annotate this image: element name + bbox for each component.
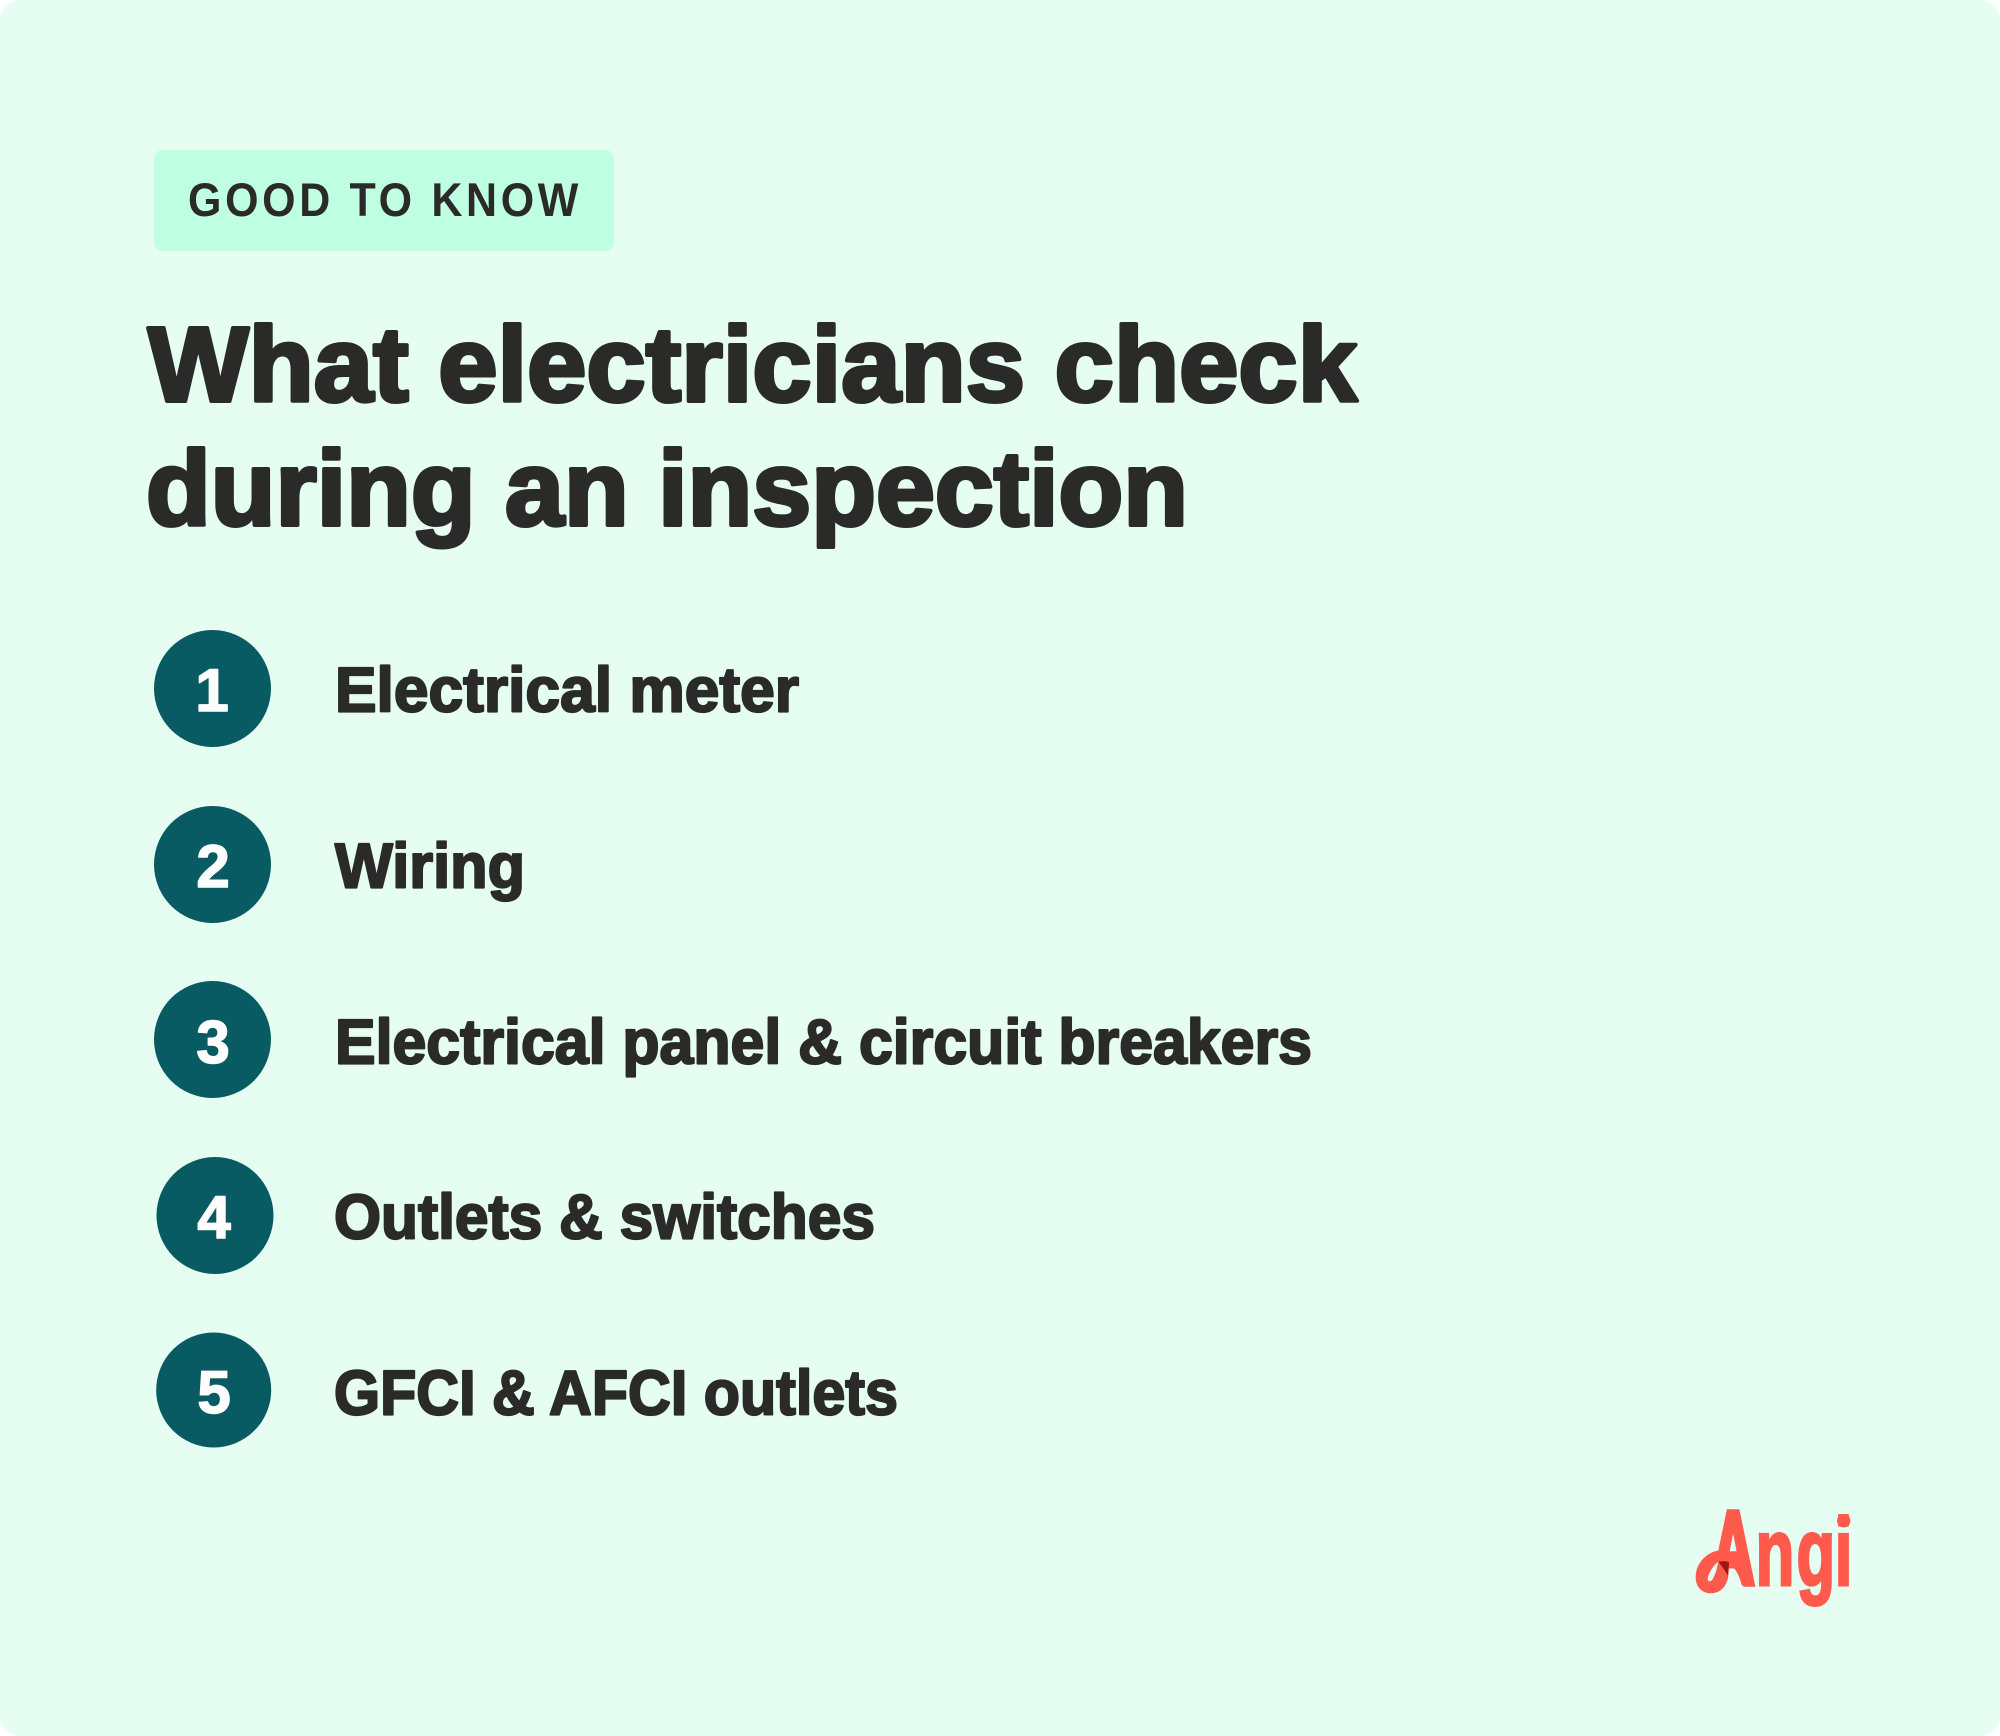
list item 3 bbox=[154, 981, 1312, 1098]
list item 1: Electrical meter bbox=[335, 656, 799, 726]
list item 5 bbox=[156, 1332, 898, 1448]
list item 1: 1 bbox=[195, 657, 229, 724]
badge: good to know: GOOD TO KNOW bbox=[188, 173, 582, 226]
title bbox=[146, 306, 1358, 548]
title: during an inspection bbox=[146, 430, 1188, 548]
list item 5: GFCI & AFCI outlets bbox=[334, 1358, 898, 1428]
logo: Angi: A bbox=[1712, 1489, 1755, 1606]
logo: Angi bbox=[1696, 1509, 1850, 1607]
list item 2 bbox=[154, 806, 525, 923]
list item 4: Outlets & switches bbox=[334, 1182, 875, 1252]
badge: good to know bbox=[154, 150, 614, 251]
list item 4 bbox=[156, 1157, 875, 1274]
logo: Angi: n bbox=[1756, 1499, 1794, 1606]
list item 5: 5 bbox=[197, 1359, 231, 1426]
list item 3: Electrical panel & circuit breakers bbox=[335, 1008, 1312, 1078]
logo: Angi: g bbox=[1797, 1499, 1835, 1606]
list item 2: Wiring bbox=[335, 832, 525, 902]
list item 4: 4 bbox=[197, 1184, 231, 1251]
list item 2: 2 bbox=[196, 833, 230, 900]
title: What electricians check bbox=[148, 306, 1358, 424]
logo: Angi: i bbox=[1835, 1499, 1852, 1606]
list item 1 bbox=[154, 630, 799, 747]
list item 3: 3 bbox=[196, 1009, 230, 1076]
